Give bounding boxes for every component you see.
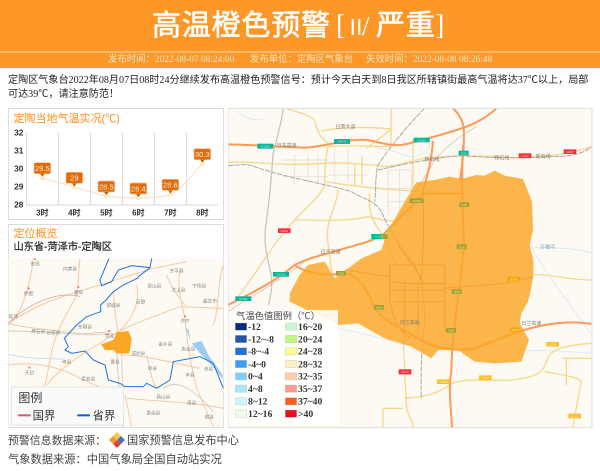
publish info line: 发布单位：定陶区气象台 — [250, 55, 353, 65]
place names: 汶上县 — [171, 287, 186, 294]
place names: 砀山县 — [156, 393, 171, 400]
place names: 梁山县 — [147, 282, 162, 289]
highway shields: G35 — [461, 203, 467, 207]
map legend: 国界 — [33, 409, 55, 422]
temperature colour legend: -8~-4 — [248, 347, 269, 358]
line chart: 29.5 — [35, 164, 50, 173]
axis labels: 30 — [14, 164, 24, 174]
highway shields: S202 — [549, 343, 556, 347]
road and river names: 万福河 — [540, 243, 555, 250]
place names: 单县 — [148, 365, 157, 372]
road and river names: 日菏大道 — [335, 124, 355, 131]
secondary roads — [228, 108, 592, 428]
place names: 东平县 — [170, 268, 184, 275]
Dingtao warning area — [290, 171, 534, 363]
highway shields: G1511 — [412, 199, 421, 203]
weather map — [228, 108, 592, 428]
road grid inside area — [345, 193, 533, 338]
highway shields: G1511 — [239, 297, 248, 301]
title: [ — [336, 10, 345, 41]
place names: 沛县 — [204, 366, 213, 373]
road and river names: 新石线 — [535, 153, 551, 160]
temperature colour legend: 35~37 — [298, 384, 323, 395]
place names: 巨野 — [136, 298, 146, 305]
place names: 濮阳 — [74, 289, 83, 296]
road and river names: 日兰高速 — [321, 248, 341, 255]
place names: 内黄县 — [63, 265, 77, 272]
line chart: 6时 — [132, 207, 145, 217]
highway shields: G1511 — [261, 144, 270, 148]
place names: 考县 — [62, 359, 72, 365]
location path: 山东省-菏泽市-定陶区 — [14, 242, 112, 253]
highway shields: G35 — [454, 290, 460, 294]
publish info line: 发布时间：2022-08-07 08:24:00 — [108, 55, 234, 65]
highway shields: G35 — [448, 329, 454, 333]
temperature colour legend: 20~24 — [298, 334, 323, 345]
place names: 菏泽 — [105, 333, 114, 340]
temperature colour legend — [233, 310, 338, 425]
road and river names: 新石线 — [494, 154, 510, 161]
place names: 济宁 — [180, 318, 190, 325]
temperature colour legend: 28~32 — [298, 359, 323, 370]
highway shields: G1511 — [338, 140, 347, 144]
place names: 宿县 — [205, 413, 214, 420]
line chart: 4时 — [68, 207, 81, 217]
weather data source: 气象数据来源：中国气象局全国自动站实况 — [8, 454, 222, 466]
highway shields: G35 — [461, 151, 467, 155]
line chart: 28.6 — [163, 181, 178, 190]
line chart: 7时 — [164, 207, 177, 217]
line chart: 28.4 — [131, 184, 147, 193]
temperature colour legend: 0~4 — [248, 372, 263, 383]
place names: 东明县 — [78, 323, 92, 330]
place names: 丰县 — [185, 372, 195, 379]
railways — [228, 108, 592, 398]
place names: 成武县 — [131, 350, 146, 357]
road and river names: 日兰高速 — [400, 319, 420, 326]
publish info line — [108, 54, 492, 65]
place names: 夏邑县 — [146, 410, 161, 416]
place names: 鹤壁 — [24, 290, 34, 297]
line chart: 5时 — [100, 207, 113, 217]
title: / — [362, 11, 370, 41]
temperature colour legend: 32~35 — [298, 372, 323, 383]
axis labels: 32 — [14, 128, 24, 138]
road and river names: 日东高速 — [277, 142, 297, 149]
location heading: 定位概览 — [14, 228, 58, 240]
temperature colour legend: -12 — [248, 322, 261, 333]
line chart — [14, 128, 218, 217]
panel: temperature chart — [8, 108, 224, 220]
highway shields: S104 — [375, 306, 383, 310]
line chart: 29 — [70, 174, 79, 183]
place names: 金乡县 — [158, 341, 173, 348]
axis labels: 28 — [14, 200, 24, 210]
place names: 萧县 — [187, 399, 197, 406]
chart heading: 定陶当地气温实况(℃) — [14, 113, 120, 125]
header banner — [0, 0, 600, 68]
place names — [9, 261, 217, 420]
place names: 曲阜市 — [203, 297, 217, 304]
place names: 郓城县 — [106, 302, 121, 309]
warning description: 定陶区气象台2022年08月07日08时24分继续发布高温橙色预警信号：预计今天白天到8日我区所辖镇街最高气温将达37℃以上，局部 — [8, 75, 588, 86]
highway shields: S105 — [510, 277, 517, 281]
highway shields: G240 — [281, 229, 288, 233]
icon: warning centre logo — [109, 432, 125, 448]
line chart: 3时 — [36, 207, 49, 217]
map legend — [12, 387, 123, 425]
province border — [64, 258, 223, 388]
place names: 延津 — [9, 313, 18, 320]
line chart: 30.3 — [195, 150, 210, 159]
temperature colour legend: -12~-8 — [248, 334, 274, 345]
city marker dots — [28, 258, 186, 369]
expressways — [228, 108, 592, 428]
road and river names — [277, 124, 555, 327]
title — [152, 10, 444, 42]
temperature colour legend: 4~8 — [248, 384, 263, 395]
warning data source: 预警信息数据来源： 国家预警信息发布中心 — [8, 435, 239, 447]
highway shields: S202 — [571, 414, 578, 418]
highway shields: G220 — [401, 370, 409, 374]
temperature colour legend: >40 — [298, 409, 313, 420]
data labels — [34, 149, 211, 194]
place names: 鱼台县 — [181, 346, 196, 353]
road and river names: 日兰高速 — [521, 320, 541, 327]
temperature colour legend: 12~16 — [248, 409, 273, 420]
temperature colour legend: -4~0 — [248, 359, 266, 370]
Dingtao area — [101, 331, 132, 353]
lake — [185, 327, 223, 379]
highway shields: S318 — [440, 380, 447, 384]
place names: 原石县 — [31, 329, 46, 335]
panel: location overview — [8, 224, 224, 428]
line chart: 28.5 — [99, 182, 114, 191]
line chart: 8时 — [196, 207, 209, 217]
locator map — [8, 258, 224, 427]
highway shields: G35 — [338, 272, 344, 276]
map legend: 省界 — [93, 409, 115, 422]
map legend: 图例 — [18, 391, 42, 405]
highway shields: G1511 — [375, 235, 384, 239]
place names: 开封 — [25, 369, 34, 376]
highway shields: S318 — [482, 376, 489, 380]
highway shields: G327 — [566, 150, 574, 154]
roads — [8, 258, 223, 427]
publish info line: 失效时间：2022-08-08 08:26:48 — [366, 55, 492, 65]
title: 高温橙色预警 — [152, 10, 331, 42]
highway shields — [235, 138, 581, 418]
temperature colour legend: 24~28 — [298, 347, 323, 358]
highway shields: S105 — [511, 328, 519, 332]
axis labels: 31 — [14, 146, 24, 156]
river — [8, 354, 63, 359]
axis labels — [14, 128, 24, 210]
rivers — [238, 112, 592, 353]
title: ] — [435, 10, 444, 41]
axis labels: 29 — [14, 182, 24, 192]
place names: 曹县 — [110, 358, 120, 365]
place names: 宁阳县 — [192, 283, 207, 290]
highway shields: G35 — [459, 245, 465, 249]
highway shields: G1511 — [417, 138, 426, 142]
place names: 长垣市 — [46, 329, 61, 336]
temperature colour legend: 16~20 — [298, 322, 323, 333]
warning description: 可达39℃，请注意防范！ — [8, 89, 119, 100]
title: 严重 — [376, 10, 436, 42]
temperature colour legend: 8~12 — [248, 397, 268, 408]
temperature colour legend: 气温色值图例（℃） — [236, 310, 320, 321]
temperature colour legend: 37~40 — [298, 397, 323, 408]
place names: 民权县 — [81, 375, 96, 382]
temperature line — [42, 164, 202, 198]
road and river names: 新石线 — [424, 156, 440, 163]
city road grid — [283, 148, 411, 215]
highway shields: G327 — [521, 154, 529, 158]
place names: 安阳 — [30, 261, 40, 268]
highway shields: G1511 — [277, 273, 286, 277]
warning description — [8, 74, 588, 100]
title: Ⅱ — [345, 10, 367, 42]
